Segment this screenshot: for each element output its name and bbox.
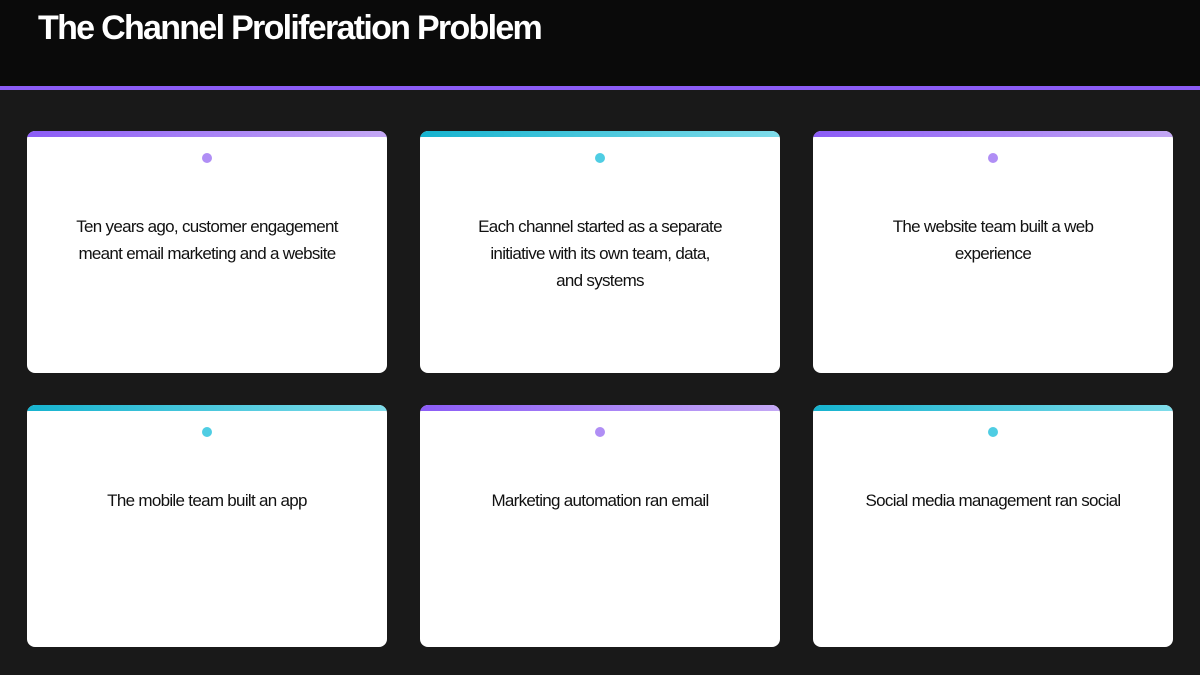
- card: website team: The website team built a web: [893, 217, 1093, 236]
- header: [0, 0, 1200, 90]
- card: social media: [813, 405, 1173, 647]
- title: The Channel Proliferation Problem: [38, 9, 541, 47]
- card: marketing automation: Marketing automation ran email: [491, 491, 709, 510]
- card: ten years ago: [27, 131, 387, 373]
- card: mobile team: [27, 405, 387, 647]
- card: social media: Social media management ran social: [866, 491, 1120, 510]
- card: marketing automation: [420, 405, 780, 647]
- card: ten years ago: meant email marketing and a website: [78, 244, 336, 263]
- card: website team: experience: [955, 244, 1031, 263]
- card: website team: [813, 131, 1173, 373]
- card: separate initiative: and systems: [556, 271, 644, 290]
- card: separate initiative: Each channel started as a separate: [478, 217, 722, 236]
- card: separate initiative: initiative with its own team, data,: [490, 244, 710, 263]
- card: separate initiative: [420, 131, 780, 373]
- card: mobile team: The mobile team built an app: [107, 491, 307, 510]
- card: ten years ago: Ten years ago, customer engagement: [76, 217, 338, 236]
